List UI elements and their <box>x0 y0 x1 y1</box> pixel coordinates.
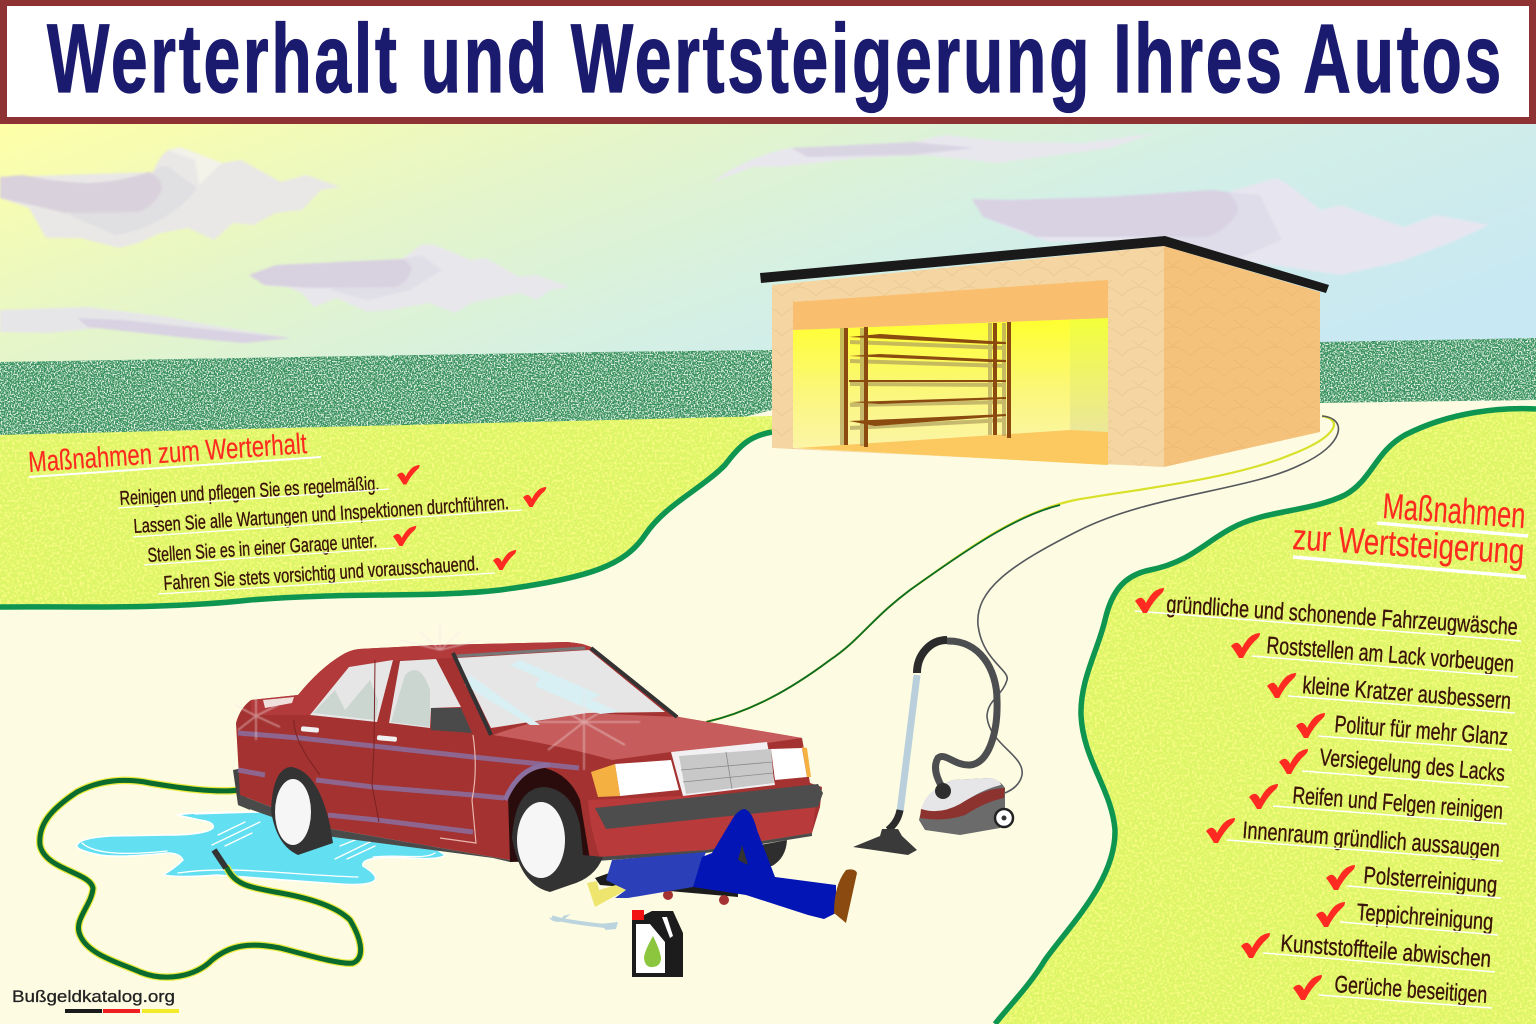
item: Teppichreinigung <box>1316 899 1498 936</box>
vacuum tube <box>900 675 917 812</box>
item: Teppichreinigung: Teppichreinigung <box>1356 899 1494 936</box>
heading: Maßnahmen zum Werterhalt: Maßnahmen zum Werterhalt <box>27 428 308 479</box>
vacuum power cord <box>978 416 1338 793</box>
car underbody <box>238 795 510 862</box>
forest band <box>0 338 1536 440</box>
logo: Bußgeldkatalog.org: Bußgeldkatalog.org <box>12 987 175 1006</box>
item: Reifen <box>1249 782 1507 825</box>
item: Kunststoffteile <box>1241 930 1495 973</box>
cloud: behind garage <box>972 178 1489 275</box>
garage lintel <box>793 280 1108 330</box>
item: Garage: Stellen Sie es in einer Garage unter. <box>147 530 378 567</box>
headlight right <box>771 748 807 780</box>
cloud: large top left <box>0 147 341 248</box>
mechanic shirt <box>606 852 706 898</box>
panel: Wertsteigerung list <box>1135 485 1528 1009</box>
puddle <box>77 812 445 884</box>
cloud: middle left <box>249 244 570 313</box>
vacuum hose <box>935 641 997 787</box>
vacuum head <box>853 810 917 855</box>
vacuum handle <box>917 640 947 673</box>
car windshield <box>457 650 665 728</box>
rear side window <box>310 660 393 722</box>
rear wheel <box>271 767 333 855</box>
item: Fahren: Fahren Sie stets vorsichtig und vorausschauend. <box>163 553 480 595</box>
item: Polsterreinigung <box>1326 862 1501 899</box>
garage roof <box>760 236 1329 293</box>
door handles <box>301 726 397 742</box>
front bumper <box>595 784 823 829</box>
indicator <box>591 764 620 797</box>
front side window <box>389 659 461 728</box>
car roof highlight <box>251 642 591 715</box>
shine sparkles <box>235 625 640 770</box>
heading: Maßnahmen zur Wertsteigerung <box>1291 485 1528 577</box>
cloud: low left <box>0 307 291 343</box>
trim strips <box>238 733 579 832</box>
front wheel <box>512 787 603 892</box>
mechanic trousers <box>693 809 836 919</box>
item: Gerüche <box>1293 971 1492 1009</box>
garden hose cable to car front <box>706 416 1334 722</box>
car front panel lower <box>588 790 818 858</box>
garden hose <box>40 780 361 977</box>
item: Wartungen: Lassen Sie alle Wartungen und Inspektionen durchführen. <box>133 492 510 538</box>
windshield frame <box>453 648 677 735</box>
garage interior <box>793 318 1108 465</box>
car far front tyre <box>760 840 787 866</box>
side mirror <box>431 708 472 733</box>
front wheel arch <box>508 768 590 862</box>
item: Politur <box>1296 711 1512 751</box>
rear light strip <box>263 697 294 708</box>
cloud: top centre <box>711 133 1156 183</box>
car rear bumper <box>233 768 250 810</box>
sky background <box>0 120 1536 420</box>
door lines <box>294 660 476 843</box>
title banner <box>4 2 1532 120</box>
vacuum body <box>919 778 1013 835</box>
vacuum cleaner <box>853 640 1013 855</box>
garage side wall <box>1164 246 1320 467</box>
panel: right lawn <box>995 409 1536 1024</box>
mechanic boot <box>834 869 857 923</box>
item: Reinigen: Reinigen und pflegen Sie es regelmäßig. <box>119 473 380 510</box>
wrench <box>549 914 618 930</box>
front sill <box>583 833 812 862</box>
headlight left <box>615 760 679 796</box>
car <box>233 625 823 892</box>
oil canister <box>632 910 683 977</box>
item: Versiegelung <box>1279 744 1509 787</box>
car hood <box>493 713 802 760</box>
road <box>0 400 1536 1024</box>
item: Polsterreinigung: Polsterreinigung <box>1363 862 1498 899</box>
logo: Bußgeldkatalog.org <box>12 987 179 1013</box>
car body <box>236 642 822 860</box>
creeper board <box>595 872 738 905</box>
panel: left lawn <box>0 416 772 607</box>
mechanic <box>587 809 857 923</box>
grille <box>679 749 774 794</box>
panel: Werterhalt list <box>27 428 546 595</box>
windshield glare <box>465 660 620 725</box>
garage front wall <box>772 246 1164 467</box>
grille frame <box>671 742 775 796</box>
shelves <box>842 322 1011 447</box>
garage floor <box>798 430 1108 465</box>
garage <box>760 236 1329 467</box>
mechanic arm <box>587 881 626 907</box>
